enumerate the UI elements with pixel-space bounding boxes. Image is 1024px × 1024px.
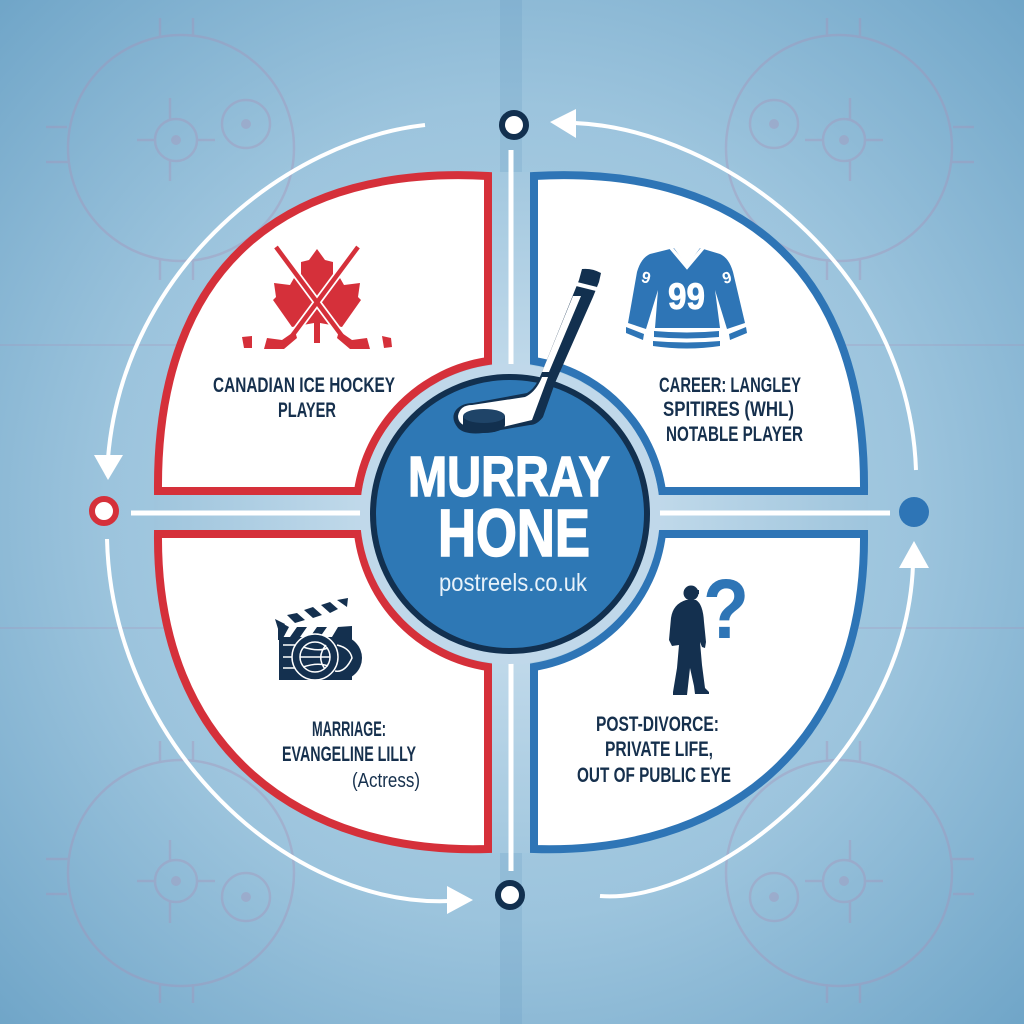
node: top — [502, 113, 526, 137]
label: PRIVATE LIFE, — [605, 738, 713, 761]
gaps between panels — [154, 172, 868, 853]
label: (Actress) — [352, 770, 420, 792]
panel: post-divorce — [534, 534, 864, 849]
icon: hockey jersey 99: 9 — [721, 269, 734, 288]
label — [282, 718, 420, 792]
panel: Canadian ice hockey player — [158, 175, 488, 491]
website: postreels.co.uk — [439, 569, 587, 597]
icon: hockey jersey 99 — [626, 248, 747, 348]
panel: marriage — [158, 534, 488, 849]
cycle arrow: bottom-left arc — [107, 539, 473, 914]
cycle arrow: top-right arc — [550, 109, 916, 470]
icon: hockey jersey 99: 99 — [668, 276, 705, 317]
icon: question mark: ? — [703, 562, 749, 656]
icon: film clapperboard with rings — [275, 598, 362, 680]
label: PLAYER — [278, 399, 336, 422]
center badge — [360, 364, 660, 664]
label: MARRIAGE: — [312, 718, 386, 741]
title — [408, 445, 610, 571]
label: SPITIRES (WHL) — [663, 398, 794, 421]
cycle arrow: bottom-right arc — [600, 541, 929, 896]
icon: hockey stick and puck — [453, 269, 601, 433]
cross lines — [131, 150, 890, 871]
panel: career — [534, 175, 864, 491]
node: bottom — [498, 883, 522, 907]
label: CAREER: LANGLEY — [659, 374, 801, 397]
label — [577, 713, 731, 787]
icon: maple leaf and crossed hockey sticks — [242, 247, 392, 349]
label: CANADIAN ICE HOCKEY — [213, 374, 395, 397]
title: MURRAY — [408, 445, 610, 509]
title: HONE — [438, 496, 590, 571]
node: right — [899, 497, 929, 527]
label — [659, 374, 803, 446]
cycle arrow: top-left arc — [94, 125, 425, 480]
icon: walking silhouette — [669, 586, 709, 695]
label: OUT OF PUBLIC EYE — [577, 764, 731, 787]
label: POST-DIVORCE: — [596, 713, 719, 736]
label — [213, 374, 395, 422]
label: EVANGELINE LILLY — [282, 743, 416, 766]
label: NOTABLE PLAYER — [666, 423, 803, 446]
node: left — [92, 499, 116, 523]
icon: hockey jersey 99: 9 — [639, 269, 652, 288]
